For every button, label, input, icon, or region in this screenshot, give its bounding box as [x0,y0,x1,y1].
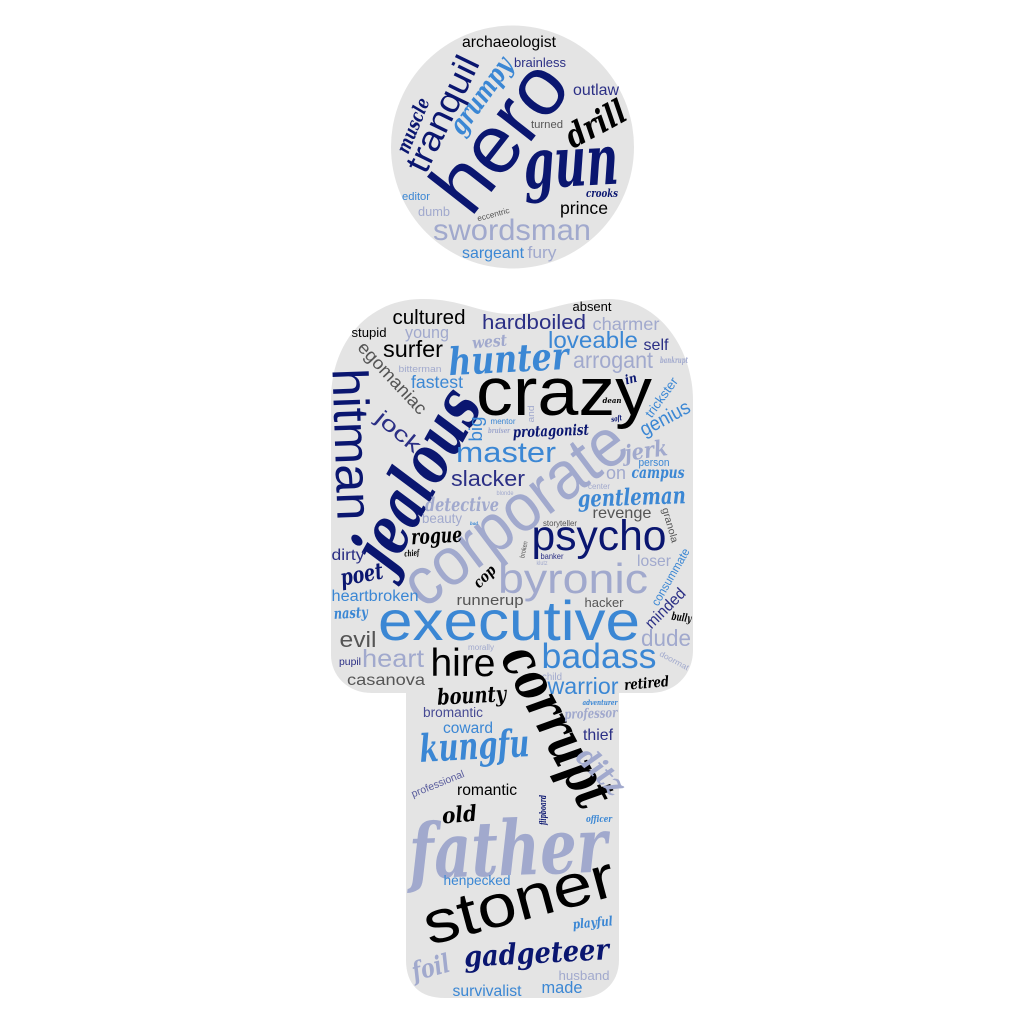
word: byronic: byronic [498,555,648,602]
word: stoner: stoner [415,842,622,958]
word: outlaw: outlaw [573,82,619,99]
word: heartbroken: heartbroken [332,588,418,605]
word: bad: bad [470,521,478,527]
word: hardboiled: hardboiled [482,312,586,334]
word: cultured: cultured [392,306,466,329]
word: adventurer: adventurer [582,698,618,707]
word: detective: detective [425,494,499,516]
word: romantic: romantic [457,782,517,799]
word: campus: campus [632,463,685,482]
word: tranquil: tranquil [398,49,488,179]
word: bruiser: bruiser [488,426,511,435]
word: dumb: dumb [418,204,450,219]
word: self: self [644,337,669,354]
word: retired: retired [623,673,670,694]
word: rogue: rogue [410,522,463,549]
word: charmer: charmer [592,314,660,334]
word: pupil: pupil [339,657,361,668]
word: loser: loser [637,553,672,570]
word: crazy: crazy [476,354,652,430]
word: husband: husband [558,968,610,983]
word: bully: bully [671,610,693,626]
word: mentor: mentor [490,416,516,426]
word: in: in [623,371,639,388]
word: center: center [588,482,610,491]
head: circular word cloud [391,26,634,268]
word: trickster: trickster [642,374,681,420]
word: klutz: klutz [536,561,548,567]
word: drill: drill [558,92,633,156]
word: master: master [456,437,556,469]
word: prince: prince [560,198,608,218]
word: psycho: psycho [532,513,666,560]
word: consummate: consummate [648,546,693,608]
word: playful: playful [572,914,613,933]
word: survivalist: survivalist [452,983,522,1000]
word: crooks: crooks [586,187,618,200]
word: big: big [466,417,486,441]
word: thief: thief [583,727,614,744]
word: person: person [638,457,670,469]
word: gentleman: gentleman [577,482,686,513]
word: beauty: beauty [422,510,462,526]
word: henpecked: henpecked [444,872,510,888]
word: cop: cop [469,561,500,592]
word: gun: gun [521,118,620,205]
word: executive: executive [378,589,640,652]
word: absent: absent [572,299,612,314]
word: casanova: casanova [347,672,425,689]
word: made: made [542,979,582,997]
word: young: young [405,323,449,342]
word: bankrupt: bankrupt [660,355,688,365]
word: warrior: warrior [546,673,619,699]
word: west: west [471,330,508,353]
word: granola: granola [659,506,680,545]
word: grumpy: grumpy [443,50,521,141]
word: hitman: hitman [321,367,383,521]
word: ditz: ditz [570,739,633,803]
word: fastest: fastest [411,372,463,392]
word: old: old [441,801,478,830]
word: officer: officer [586,815,613,825]
word: genius: genius [636,396,694,441]
word: dean: dean [602,396,622,405]
word: storyteller: storyteller [543,519,577,528]
word: professor: professor [564,705,618,723]
word: jerk: jerk [619,435,669,467]
word: brainless: brainless [514,55,566,70]
word: runnerup: runnerup [456,592,524,609]
word: jock: jock [370,406,426,458]
word: editor: editor [402,191,430,203]
word: soft: soft [610,413,623,424]
word: and: and [526,406,536,422]
word: bromantic: bromantic [423,705,483,720]
word: slacker: slacker [451,466,525,491]
word: broken: broken [519,541,530,559]
word: hero: hero [412,41,587,229]
word: bounty: bounty [437,681,509,711]
word: flipboard: flipboard [539,795,549,826]
word: kungfu: kungfu [418,720,530,771]
word: professional: professional [410,768,466,800]
word: corporate: corporate [387,403,642,622]
word: banker: banker [540,551,564,561]
word: jealous: jealous [331,374,498,589]
word: turned: turned [531,119,563,131]
word: badass: badass [542,637,656,676]
word: hunter: hunter [447,333,572,384]
word: sargeant: sargeant [462,245,525,262]
word: morally: morally [468,643,494,652]
word: eccentric: eccentric [476,206,510,223]
word: egomaniac: egomaniac [354,337,431,418]
word: nasty: nasty [333,603,369,623]
word: stupid: stupid [352,325,386,340]
word: on: on [606,463,626,483]
word: fury: fury [527,243,557,262]
word: arrogant: arrogant [573,347,654,373]
word: chief: chief [404,548,421,560]
word: poet: poet [338,558,385,592]
word: doormat: doormat [658,649,691,673]
word: foil: foil [407,949,453,988]
word: archaeologist: archaeologist [462,34,557,51]
word: revenge: revenge [593,505,652,522]
word: gadgeteer: gadgeteer [463,932,612,974]
word: muscle: muscle [392,95,434,157]
word: minded: minded [642,585,690,633]
word: heart: heart [362,645,424,673]
word: bitterman: bitterman [398,364,442,375]
body background shape [331,299,693,998]
word: dude: dude [641,625,691,651]
word: corrupt: corrupt [487,633,628,819]
word: father: father [404,800,612,897]
word: coward: coward [443,720,493,737]
word: child: child [542,672,562,683]
word: evil: evil [340,627,376,652]
word: surfer: surfer [383,336,443,362]
head background circle [391,26,634,268]
word: blonde: blonde [496,491,514,497]
word: dirty: dirty [332,547,364,564]
word: protagonist: protagonist [513,421,589,441]
word: swordsman: swordsman [433,214,591,247]
word: hacker: hacker [584,595,624,610]
word: loveable: loveable [548,327,638,353]
word: hire: hire [430,642,496,685]
body: person-shaped word cloud [321,299,694,1000]
